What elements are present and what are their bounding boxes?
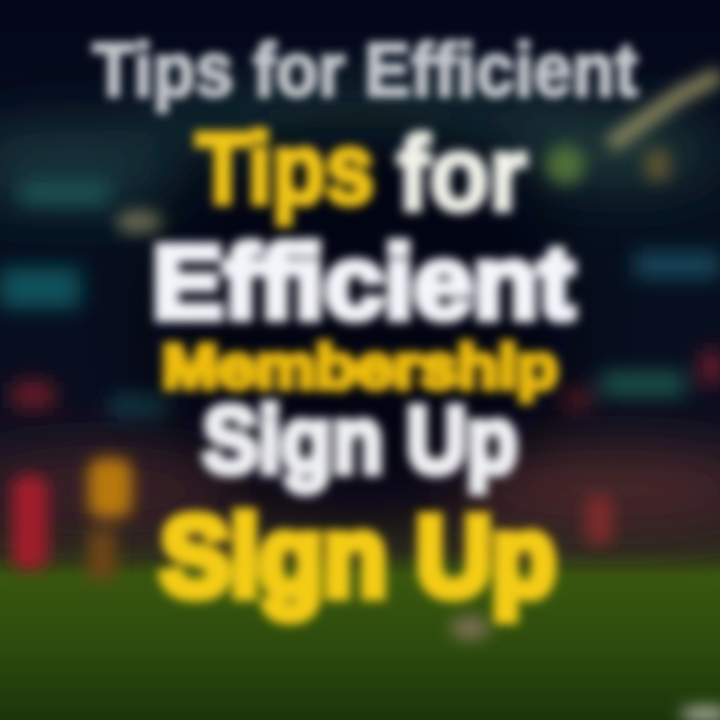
heading: faint top title: Tips for Efficient: [92, 28, 638, 113]
title line: Tips for: [196, 113, 527, 233]
title line: Sign Up yellow: Sign Up: [160, 494, 556, 619]
title line: Tips for: Tips: [196, 113, 374, 225]
title line: Tips for: for: [397, 115, 527, 233]
title line: Sign Up white: Sign Up: [202, 387, 518, 492]
central title block: [152, 113, 574, 619]
stadium lights and boards: [0, 182, 720, 416]
title line: Membership: Membership: [162, 333, 558, 402]
title line: Efficient: Efficient: [152, 225, 574, 341]
players: [12, 458, 720, 720]
dark halo behind central title: [150, 130, 570, 510]
stadium glow: upper stands: [0, 93, 720, 525]
light streak top right: [116, 75, 720, 234]
